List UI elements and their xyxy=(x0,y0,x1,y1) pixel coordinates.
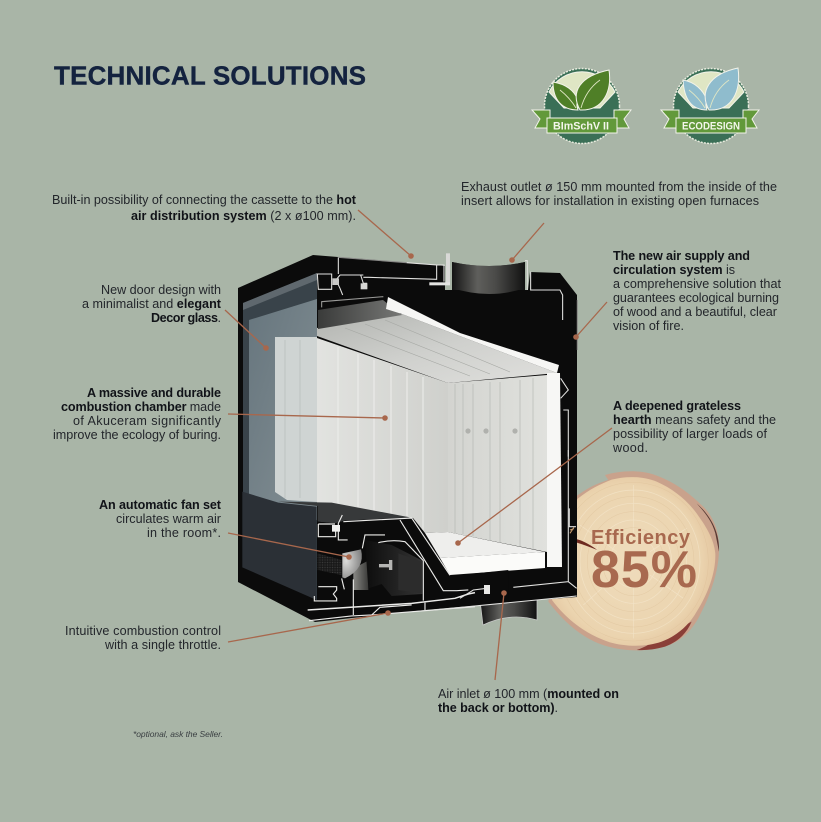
efficiency value: 85% xyxy=(591,541,697,599)
motor knob xyxy=(379,560,392,570)
text: air supply system: guarantees ecological burning xyxy=(613,291,779,305)
ceiling underside xyxy=(317,314,557,383)
text: combustion chamber: combustion chamber made xyxy=(61,400,221,414)
leader: combustion chamber xyxy=(228,414,388,421)
text: door design xyxy=(82,283,222,325)
outlet pipe back xyxy=(452,262,525,296)
right white wall xyxy=(547,373,562,567)
wood log with efficiency figure xyxy=(548,471,719,650)
leader: air supply xyxy=(573,302,607,340)
text: hot air distribution: Built-in possibility of connecting the cassette to the hot xyxy=(52,193,357,207)
ceiling front bar xyxy=(318,300,402,329)
text: deepened hearth: A deepened grateless xyxy=(613,399,741,413)
upper section profiles xyxy=(317,253,450,307)
log crack xyxy=(576,539,597,550)
text: air supply system: vision of fire. xyxy=(613,319,684,333)
right side profiles xyxy=(525,261,577,457)
text: exhaust outlet: Exhaust outlet ø 150 mm mounted from the inside of the xyxy=(461,180,777,194)
text: automatic fan: An automatic fan set xyxy=(99,498,222,512)
lower door frame and compartment xyxy=(242,492,508,621)
text: deepened hearth: possibility of larger loads of xyxy=(613,427,768,441)
text: door design: a minimalist and elegant xyxy=(82,297,222,311)
text: hot air distribution xyxy=(52,193,357,223)
text: deepened hearth: hearth means safety and the xyxy=(613,413,776,427)
text: air inlet: the back or bottom). xyxy=(438,701,558,715)
combustion chamber back wall xyxy=(448,375,547,552)
text: combustion control: Intuitive combustion control xyxy=(65,624,221,638)
text: air inlet xyxy=(438,687,619,715)
leader: hearth xyxy=(455,428,612,546)
throttle clip xyxy=(484,585,490,594)
text: air supply system: a comprehensive solution that xyxy=(613,277,782,291)
white section lines xyxy=(308,515,475,621)
log face xyxy=(552,477,715,646)
text: door design: New door design with xyxy=(101,283,221,297)
leader: fan xyxy=(228,533,352,560)
leader: exhaust outlet xyxy=(509,223,544,263)
text: hot air distribution: air distribution system (2 x ø100 mm). xyxy=(131,209,356,223)
leader: air inlet xyxy=(495,590,507,680)
text: air supply system: circulation system is xyxy=(613,263,735,277)
bottom inlet pipe xyxy=(480,597,537,625)
badge: ECODESIGN: ECODESIGN xyxy=(682,120,740,132)
text: combustion chamber: of Akuceram significantly xyxy=(73,414,222,428)
badge: BImSchV II xyxy=(532,68,631,144)
ceiling slab xyxy=(386,297,559,373)
leader: hot air connection xyxy=(358,210,414,259)
text: automatic fan: in the room*. xyxy=(147,526,221,540)
text: air supply system xyxy=(613,249,782,333)
fan xyxy=(342,549,362,578)
text: door design: Decor glass. xyxy=(151,311,221,325)
text: deepened hearth xyxy=(612,399,776,455)
text: air supply system: of wood and a beautiful, clear xyxy=(613,305,777,319)
badge: BImSchV II: BImSchV II xyxy=(553,120,609,132)
text: combustion control: with a single throttle. xyxy=(104,638,221,652)
floor and right section lines xyxy=(433,450,577,610)
efficiency label: Efficiency xyxy=(591,527,691,549)
fan motor xyxy=(365,540,422,596)
black body xyxy=(238,255,577,622)
text: exhaust outlet xyxy=(461,180,777,208)
badge: ECODESIGN xyxy=(661,68,759,144)
combustion chamber left wall xyxy=(317,338,448,533)
log rim xyxy=(548,471,719,650)
text: combustion chamber: A massive and durable xyxy=(87,386,221,400)
text: automatic fan: circulates warm air xyxy=(116,512,221,526)
leader: throttle xyxy=(228,610,391,642)
wall bolts xyxy=(465,428,518,434)
text: automatic fan xyxy=(99,498,222,540)
text: combustion chamber xyxy=(53,386,222,442)
fan mesh xyxy=(318,553,342,575)
door glass xyxy=(243,273,317,600)
text: deepened hearth: wood. xyxy=(612,441,648,455)
title: TECHNICAL SOLUTIONS xyxy=(54,60,366,90)
hearth floor xyxy=(425,532,545,558)
pipe inside view xyxy=(452,262,525,294)
footnote: *optional, ask the Seller. xyxy=(133,729,223,739)
white clip xyxy=(332,525,340,532)
text: exhaust outlet: insert allows for installation in existing open furnaces xyxy=(461,194,759,208)
text: air supply system: The new air supply and xyxy=(613,249,750,263)
leader: door glass xyxy=(225,310,269,351)
light panel xyxy=(353,561,368,590)
text: combustion chamber: improve the ecology of buring. xyxy=(53,428,221,442)
fireplace cutaway xyxy=(238,253,577,625)
text: air inlet: Air inlet ø 100 mm (mounted on xyxy=(438,687,619,701)
text: combustion control xyxy=(65,624,221,652)
